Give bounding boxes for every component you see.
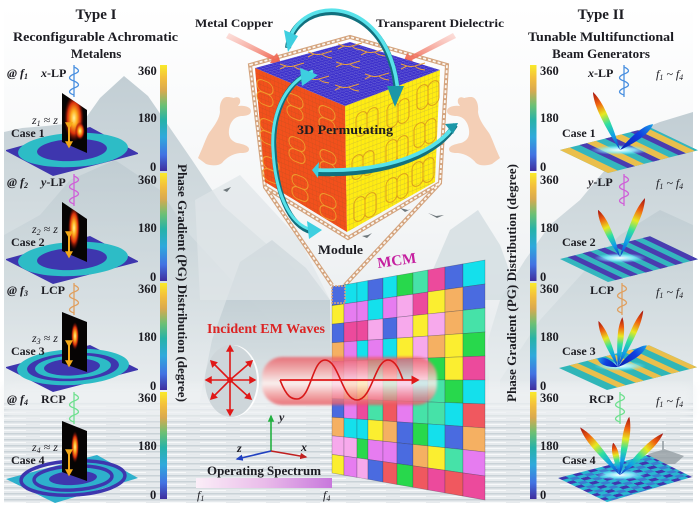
right colour bars: 180 bbox=[540, 439, 559, 453]
panel: Type II case 2 bbox=[560, 174, 698, 282]
panel: Type I case 2: 2 bbox=[23, 181, 28, 190]
label: Metal Copper: Metal Copper bbox=[195, 16, 274, 30]
arrow: metal copper pointer bbox=[226, 33, 281, 63]
panel: Type II case 3: 1 bbox=[659, 291, 663, 300]
arrow: top rotation arc bbox=[284, 10, 404, 107]
label: MCM: MCM bbox=[376, 251, 417, 272]
right colour bars: 360 bbox=[540, 173, 559, 187]
beam: incident wave bbox=[262, 357, 437, 405]
panel: Type II case 2: Case 2 bbox=[562, 235, 596, 249]
operating spectrum legend: 1 bbox=[200, 494, 204, 503]
panel: Type I case 2 bbox=[6, 174, 138, 284]
right colour bars: 0 bbox=[540, 379, 546, 393]
panel: Type I case 1: Case 1 bbox=[11, 126, 45, 140]
panel: Type II case 2: 1 bbox=[659, 182, 663, 191]
Type II heading bbox=[528, 7, 674, 61]
panel: Type I case 1: 1 bbox=[37, 119, 41, 128]
panel: Type II case 4: 1 bbox=[659, 400, 663, 409]
left colour bars: 180 bbox=[138, 111, 157, 125]
panel: Type I case 4: 4 bbox=[23, 398, 28, 407]
left colour bars: 360 bbox=[138, 282, 157, 296]
right colour bars: 360 bbox=[540, 282, 559, 296]
Type II heading: Type II bbox=[578, 7, 625, 23]
cube: 3D module bbox=[255, 42, 440, 232]
panel: Type II case 1: f bbox=[656, 67, 659, 81]
coordinate axes bbox=[236, 410, 307, 459]
panel: Type I case 2: y-LP bbox=[39, 175, 66, 189]
panel: Type I case 3: 3 bbox=[36, 337, 41, 346]
Type I heading: Metalens bbox=[71, 46, 121, 61]
label: 3D Permutating: 3D Permutating bbox=[297, 122, 394, 137]
panel: Type I case 1: ≈ z bbox=[41, 113, 58, 127]
panel: Type I case 1: x-LP bbox=[40, 66, 66, 80]
panel: Type I case 4: Case 4 bbox=[11, 453, 45, 467]
operating spectrum legend: Operating Spectrum bbox=[207, 463, 321, 478]
panel: Type I case 4 bbox=[6, 392, 138, 503]
panel: Type II case 2: ~ f bbox=[663, 176, 681, 190]
panel: Type II case 4: 4 bbox=[679, 400, 683, 409]
panel: Type I case 3: 3 bbox=[23, 289, 28, 298]
panel: Type II case 3: Case 3 bbox=[562, 344, 596, 358]
panel: Type I case 2: Case 2 bbox=[11, 235, 45, 249]
label: Incident EM Waves: Incident EM Waves bbox=[207, 321, 325, 336]
panel: Type I case 2: z bbox=[32, 222, 37, 236]
left colour bars: 180 bbox=[138, 439, 157, 453]
panel: Type I case 3: Case 3 bbox=[11, 344, 45, 358]
panel: Type II case 1: x-LP bbox=[587, 66, 613, 80]
panel: Type II case 3: ~ f bbox=[663, 285, 681, 299]
panel: Type II case 4: RCP bbox=[589, 392, 614, 406]
panel: Type I case 4: z bbox=[32, 440, 37, 454]
panel: Type I case 2: ≈ z bbox=[41, 222, 58, 236]
left colour bars: 180 bbox=[138, 221, 157, 235]
left axis title: Phase Gradient (PG) Distribution (degree) bbox=[175, 164, 189, 402]
panel: Type I case 3: LCP bbox=[41, 283, 65, 297]
panel: Type I case 4: RCP bbox=[41, 392, 66, 406]
panel: Type I case 2: 2 bbox=[37, 228, 41, 237]
panel: Type II case 4: f bbox=[656, 394, 659, 408]
arrow: horizontal rotation arc bbox=[312, 123, 458, 178]
right colour bars bbox=[530, 64, 559, 502]
left colour bars: 360 bbox=[138, 391, 157, 405]
panel: Type I case 3 bbox=[6, 283, 138, 392]
panel: Type II case 4 bbox=[558, 392, 692, 502]
panel: Type II case 3: 4 bbox=[679, 291, 683, 300]
right colour bars: 360 bbox=[540, 64, 559, 78]
panel: Type II case 2: y-LP bbox=[586, 175, 613, 189]
left colour bars: 0 bbox=[150, 379, 156, 393]
operating spectrum legend: 4 bbox=[326, 494, 330, 503]
panel: Type II case 4: Case 4 bbox=[562, 453, 596, 467]
panel: Type I case 1 bbox=[6, 65, 138, 176]
panel: Type I case 4: 4 bbox=[37, 446, 41, 455]
label: Module: Module bbox=[318, 242, 363, 257]
panel: Type II case 3: f bbox=[656, 285, 659, 299]
panel: Type I case 4: @ f bbox=[7, 392, 24, 406]
MCM metasurface grid bbox=[332, 260, 485, 500]
selected module square bbox=[332, 286, 345, 303]
panel: Type I case 3: ≈ z bbox=[41, 331, 58, 345]
operating spectrum legend: f bbox=[197, 488, 200, 502]
operating spectrum legend bbox=[196, 463, 332, 503]
icon: polarisation star bbox=[205, 345, 259, 417]
right colour bars: 180 bbox=[540, 111, 559, 125]
panel: Type II case 3 bbox=[559, 283, 697, 390]
decorative birds bbox=[223, 187, 444, 238]
left colour bars: 180 bbox=[138, 330, 157, 344]
right colour bars: 360 bbox=[540, 391, 559, 405]
panel: Type II case 3: LCP bbox=[590, 283, 614, 297]
left colour bars bbox=[138, 64, 167, 502]
Type I heading: Type I bbox=[76, 7, 117, 23]
Type I heading: Reconfigurable Achromatic bbox=[13, 29, 178, 44]
icon: right hand bbox=[447, 97, 500, 165]
coordinate axes: x bbox=[300, 440, 307, 454]
panel: Type I case 1: @ f bbox=[7, 66, 24, 80]
left colour bars: 0 bbox=[150, 160, 156, 174]
left colour bars: 0 bbox=[150, 270, 156, 284]
right colour bars: 0 bbox=[540, 270, 546, 284]
arrow: transparent dielectric pointer bbox=[403, 33, 456, 63]
panel: Type I case 1: 1 bbox=[24, 72, 28, 81]
panel: Type II case 1 bbox=[560, 65, 698, 173]
right colour bars: 180 bbox=[540, 221, 559, 235]
left colour bars: 0 bbox=[150, 488, 156, 502]
right axis title: Phase Gradient (PG) Distribution (degree) bbox=[505, 164, 519, 402]
panel: Type II case 4: ~ f bbox=[663, 394, 681, 408]
icon: left hand bbox=[198, 97, 251, 165]
Type II heading: Tunable Multifunctional bbox=[528, 29, 674, 44]
arrow: left rotation arc bbox=[273, 68, 322, 239]
panel: Type II case 2: f bbox=[656, 176, 659, 190]
module chain outline bbox=[250, 37, 447, 285]
label: Transparent Dielectric: Transparent Dielectric bbox=[376, 16, 505, 30]
right colour bars: 0 bbox=[540, 488, 546, 502]
coordinate axes: z bbox=[236, 441, 242, 455]
decorative ship bbox=[648, 441, 684, 464]
Type II heading: Beam Generators bbox=[552, 46, 650, 61]
left colour bars: 360 bbox=[138, 173, 157, 187]
panel: Type I case 1: z bbox=[32, 113, 37, 127]
operating spectrum legend: f bbox=[323, 488, 326, 502]
panel: Type II case 1: ~ f bbox=[663, 67, 681, 81]
left colour bars: 360 bbox=[138, 64, 157, 78]
right colour bars: 0 bbox=[540, 160, 546, 174]
panel: Type II case 1: Case 1 bbox=[562, 126, 596, 140]
panel: Type I case 3: z bbox=[32, 331, 37, 345]
panel: Type I case 2: @ f bbox=[7, 175, 24, 189]
panel: Type II case 1: 1 bbox=[659, 73, 663, 82]
panel: Type I case 3: @ f bbox=[7, 283, 24, 297]
coordinate axes: y bbox=[277, 410, 285, 424]
panel: Type I case 4: ≈ z bbox=[41, 440, 58, 454]
Type I heading bbox=[13, 7, 178, 61]
panel: Type II case 1: 4 bbox=[679, 73, 683, 82]
right colour bars: 180 bbox=[540, 330, 559, 344]
panel: Type II case 2: 4 bbox=[679, 182, 683, 191]
